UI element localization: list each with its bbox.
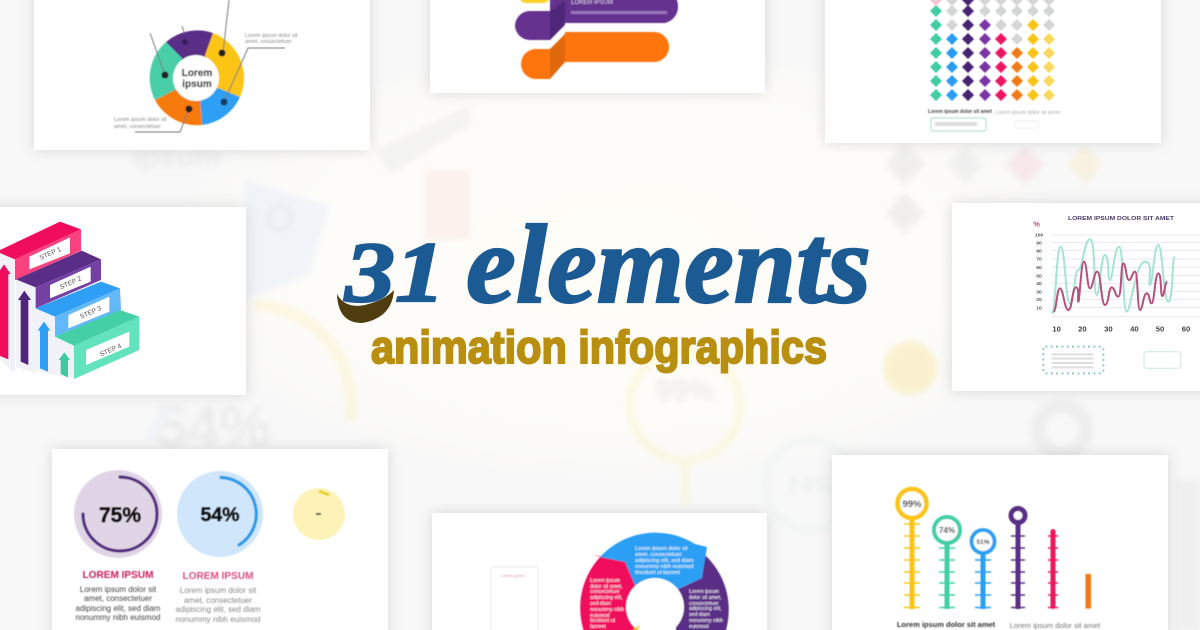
pink text: Lorem ipsum	[590, 578, 620, 584]
panel: line chart	[952, 203, 1200, 391]
caption light: Lorem ipsum dolor sit amet	[1010, 621, 1101, 630]
purple text: euismod	[689, 624, 709, 630]
step 1	[0, 222, 81, 280]
hub	[626, 578, 684, 630]
grid lines	[1052, 235, 1200, 317]
arrow: purple	[18, 291, 31, 365]
brown swash on the 3	[337, 290, 394, 323]
callout text: amet, consectetuer	[114, 124, 161, 130]
text block two: nonummy nibh euismod	[176, 615, 260, 624]
faded background elements: 99%	[655, 374, 715, 407]
y axis labels: 90	[1036, 240, 1042, 246]
title: 31 elements: 31	[344, 224, 445, 320]
x axis labels: 40	[1130, 325, 1139, 334]
text block one: nonummy nibh euismod	[76, 613, 160, 622]
blue text: adipiscing elit, sed diam	[635, 558, 694, 564]
purple band: LOREM IPSUM	[571, 0, 613, 6]
pink text: sed diam	[590, 601, 611, 607]
panel: donut chart	[34, 0, 370, 150]
purple band	[515, 0, 678, 40]
pink series	[1053, 262, 1167, 312]
bar yellow 99%: 99%	[902, 499, 922, 510]
y axis labels: 20	[1036, 297, 1042, 303]
y axis labels: 40	[1036, 281, 1042, 287]
text block one: LOREM IPSUM	[82, 569, 154, 581]
arrow: blue	[38, 322, 50, 372]
step 2	[16, 251, 101, 308]
teal series	[1052, 239, 1175, 313]
pink text: nonummy nibh	[590, 607, 624, 613]
gauge 54%: 54%	[200, 504, 240, 526]
y axis labels: 100	[1035, 233, 1043, 239]
x axis labels: 20	[1078, 325, 1087, 334]
x axis labels: 10	[1052, 325, 1061, 334]
callout text: amet, consectetuer	[245, 39, 292, 45]
y axis labels: 80	[1036, 248, 1042, 254]
bar blue 51%: 51%	[976, 539, 990, 546]
text block two: adipiscing elit, sed diam	[176, 605, 261, 614]
y axis labels: 10	[1036, 305, 1042, 311]
step 4: STEP 4	[99, 343, 123, 358]
purple segment	[676, 555, 729, 630]
legend button	[1015, 121, 1039, 128]
leader dots	[162, 39, 228, 112]
side faces	[0, 250, 74, 379]
bar orange	[1086, 574, 1091, 608]
panel: stacked bands	[430, 0, 765, 93]
x axis labels: 30	[1104, 325, 1113, 334]
dotted callout	[1043, 347, 1103, 373]
empty side card	[491, 567, 538, 630]
blue text: nonummy nibh euismod	[635, 564, 693, 570]
legend text light: Lorem ipsum dolor sit amet	[995, 110, 1060, 116]
gauge starting	[293, 488, 345, 540]
donut segments	[150, 30, 244, 125]
panel: diamond matrix	[825, 0, 1161, 143]
pink text: euismod	[590, 613, 610, 619]
title block	[337, 203, 871, 373]
gauge 75%: 75%	[99, 504, 141, 527]
faded background elements	[133, 105, 1200, 630]
diamonds grid	[930, 0, 1055, 101]
x axis labels: 60	[1182, 325, 1190, 334]
text block one: adipiscing elit, sed diam	[76, 604, 161, 613]
step 3	[36, 282, 121, 337]
pink text: dolor sit amet,	[590, 584, 623, 590]
gauge 75%	[74, 470, 162, 558]
y axis labels: 30	[1036, 289, 1042, 295]
leader lines	[135, 0, 285, 132]
button	[1144, 352, 1181, 368]
blue segment	[600, 533, 707, 592]
pink text: tincidunt ut	[590, 618, 616, 624]
bar purple	[1011, 508, 1025, 609]
pink segment	[580, 555, 640, 630]
subtitle: animation infographics	[371, 321, 827, 373]
purple text: consectetuer	[689, 601, 719, 607]
y axis labels: 60	[1036, 265, 1042, 271]
legend box	[931, 118, 986, 131]
blue text: Lorem ipsum dolor sit	[635, 546, 688, 552]
text block two	[176, 570, 261, 624]
step 4	[55, 310, 139, 379]
y axis labels: 70	[1036, 257, 1042, 263]
faded background elements: 74%	[786, 472, 834, 499]
pink text: consectetuer	[590, 589, 620, 595]
panel: circular arrows	[432, 513, 767, 630]
pink text: laoreet	[590, 624, 606, 630]
step 1: STEP 1	[39, 246, 63, 262]
step 3: STEP 3	[79, 305, 103, 321]
empty side card: Lorem ipsum	[501, 573, 525, 578]
bar pink	[1048, 529, 1058, 609]
orange band	[521, 32, 669, 79]
arrow: pink	[0, 264, 11, 359]
panel: isometric steps	[0, 207, 246, 395]
y axis labels: 50	[1036, 273, 1042, 279]
faded background elements: 54%	[155, 395, 271, 460]
title: 31 elements: elements	[466, 203, 871, 327]
bar yellow 99%	[898, 489, 926, 609]
purple text: sed diam	[689, 612, 710, 618]
pink text: adipiscing elit,	[590, 595, 623, 601]
text block one: Lorem ipsum dolor sit	[80, 585, 157, 594]
callout text: Lorem ipsum dolor sit	[114, 117, 167, 123]
callout text: Lorem ipsum dolor sit	[245, 33, 298, 39]
panel: percentage circles	[52, 449, 388, 630]
bar teal 74%	[934, 517, 960, 609]
purple text: nonummy nibh	[689, 618, 723, 624]
text block two: LOREM IPSUM	[182, 570, 254, 582]
faded background elements: ipsum	[133, 141, 221, 174]
purple text: dolor sit amet,	[689, 595, 722, 601]
arrow: teal	[59, 352, 70, 377]
percent sign: %	[1033, 220, 1040, 229]
caption bold: Lorem ipsum dolor sit amet	[897, 620, 996, 629]
purple text: adipiscing elit,	[689, 606, 722, 612]
text block two: Lorem ipsum dolor sit	[180, 586, 257, 595]
blue text: amet, consectetuer	[635, 552, 682, 558]
x axis labels: 50	[1156, 325, 1164, 334]
legend text bold: Lorem ipsum dolor sit amet	[928, 109, 992, 115]
yellow band	[520, 0, 549, 3]
yellow arrow tip	[632, 625, 640, 630]
text block one: amet, consectetuer	[84, 594, 152, 603]
gauge 54%	[177, 471, 263, 557]
chart title: LOREM IPSUM DOLOR SIT AMET	[1068, 216, 1175, 222]
donut centre label: Lorem	[182, 68, 212, 79]
blue text: tincidunt ut laoreet	[635, 570, 680, 576]
donut centre label: ipsum	[182, 79, 212, 90]
text block one	[76, 569, 161, 622]
step 2: STEP 2	[59, 275, 83, 291]
text block two: amet, consectetuer	[184, 596, 252, 605]
purple text: Lorem ipsum	[689, 589, 719, 595]
bar teal 74%: 74%	[939, 526, 955, 535]
panel: lollipop bars	[832, 455, 1168, 630]
bar blue 51%	[972, 530, 994, 609]
